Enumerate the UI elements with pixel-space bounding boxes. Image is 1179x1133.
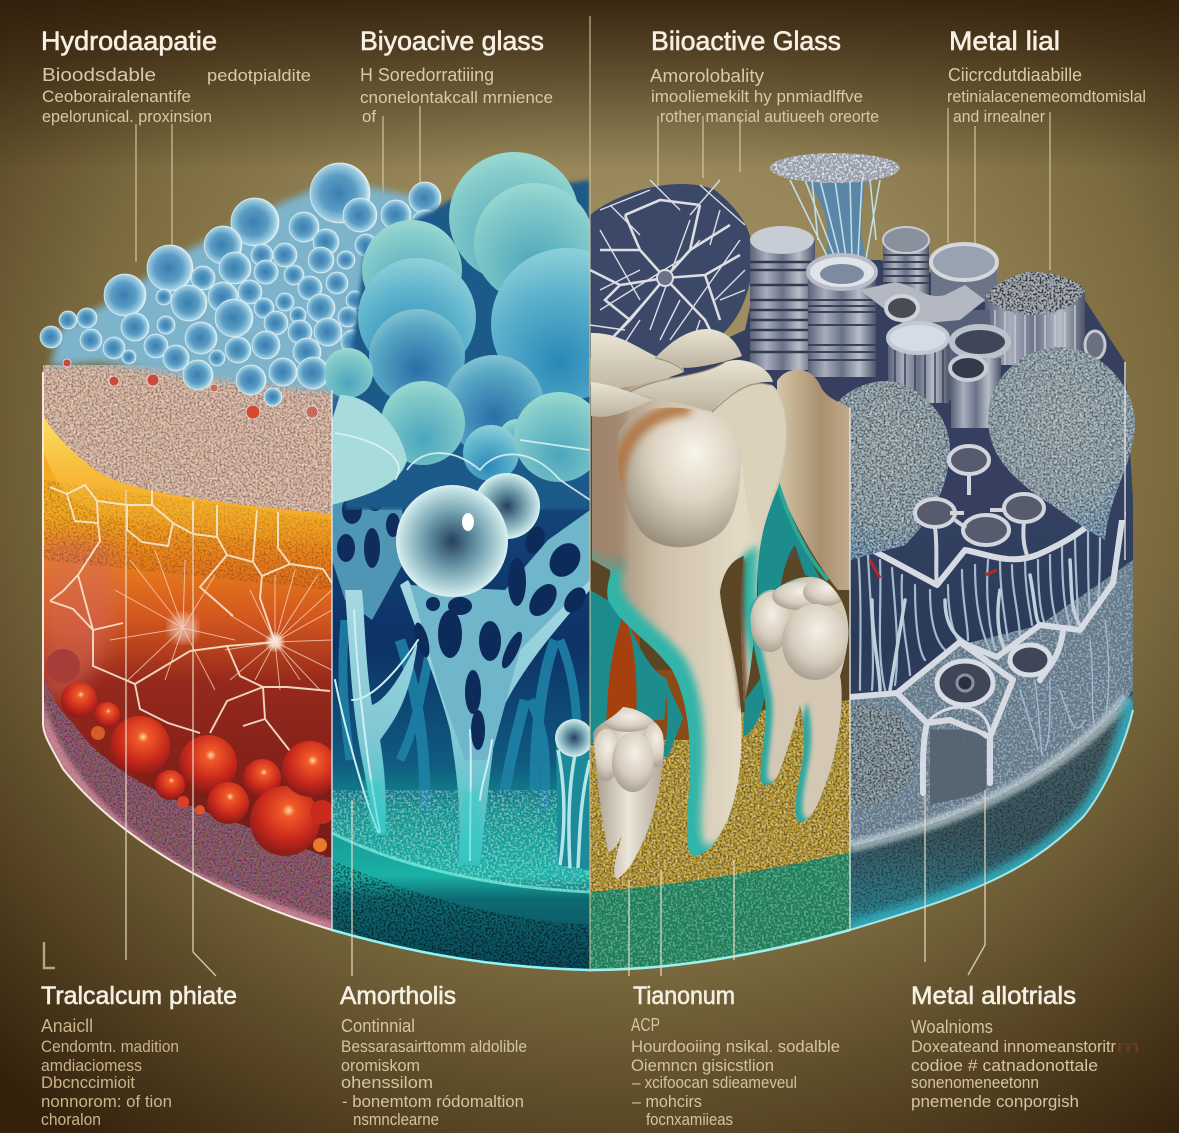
text block: top column 1: epelorunical. proxinsion: [42, 107, 212, 126]
text block: top column 1: [41, 26, 311, 126]
text block: bottom column 1: Anaicll: [41, 1016, 93, 1036]
bubble cluster: hydroxyapatite top: [40, 163, 441, 419]
text block: bottom column 3: Hourdooiing nsikal. sodalble: [631, 1037, 840, 1056]
metal cylinder C: [883, 227, 929, 300]
bright foam band: [850, 697, 1127, 847]
text block: bottom column 3: Oiemncn gisicstlion: [631, 1056, 774, 1075]
text block: top column 4: [947, 26, 1146, 126]
panel: bioactive glass lattice section: [332, 380, 593, 970]
foam field above band: [850, 560, 1133, 847]
back tooth: [777, 369, 850, 590]
small sphere stalk: [555, 719, 593, 870]
text block: bottom column 2: Continnial: [341, 1016, 415, 1036]
text block: bottom column 1: amdiaciomess: [41, 1056, 142, 1075]
text block: bottom column 2: nsmnclearne: [353, 1110, 439, 1129]
web struts: [850, 503, 1123, 793]
panel: hydroxyapatite layered section: [43, 365, 338, 932]
text block: bottom column 1: choralon: [41, 1110, 101, 1129]
text block: top column 3: imooliemekilt hy pnmiadlffve: [651, 87, 863, 106]
trabecular dome: [590, 180, 753, 358]
small molar right: [750, 574, 855, 822]
lattice mesh left: [332, 502, 402, 620]
heading: Metal lial: [949, 26, 1060, 56]
text block: top column 4: and irnealner: [953, 107, 1045, 126]
heading: Tianonum: [633, 982, 735, 1010]
strut rings: [937, 645, 1050, 705]
text block: bottom column 2: oromiskom: [341, 1056, 420, 1075]
text block: bottom column 4: pnemende conporgish: [911, 1092, 1079, 1111]
text block: bottom column 1: Cendomtn. madition: [41, 1037, 179, 1056]
scaffold backing: [590, 260, 1125, 520]
heading: Tralcalcum phiate: [41, 982, 237, 1010]
text block: top column 1: pedotpialdite: [207, 66, 311, 85]
beige granular top: [43, 365, 332, 514]
text block: top column 2: H Soredorratiiing: [360, 65, 494, 85]
heading: Metal allotrials: [911, 982, 1076, 1010]
metal structures: top scaffolds: [590, 153, 1125, 520]
crown cusps: [591, 329, 786, 547]
text block: bottom column 3: [631, 982, 840, 1129]
text block: top column 2: [360, 26, 553, 126]
metal cylinder B: [808, 255, 876, 377]
heading: Amortholis: [340, 982, 456, 1010]
glass orb on lattice: [396, 485, 508, 597]
text block: bottom column 1: [41, 982, 237, 1129]
speckled gold floor: [590, 690, 850, 970]
lattice plate block: [985, 272, 1085, 365]
main molar: [592, 377, 788, 856]
crackle floor: [332, 790, 590, 893]
text block: bottom column 3: ACP: [631, 1015, 660, 1035]
cell wall lines: [50, 485, 332, 751]
background strands: [343, 620, 577, 810]
text block: bottom column 4: m: [1116, 1037, 1140, 1056]
text block: top column 3: Amorolobality: [650, 66, 764, 86]
text block: bottom column 3: focnxamiieas: [646, 1110, 733, 1129]
small molar left: [592, 707, 668, 879]
lattice mesh centre: [410, 510, 590, 760]
heading: Hydrodaapatie: [41, 26, 217, 56]
text block: bottom column 2: [340, 982, 527, 1129]
metal cylinder A: [750, 226, 815, 370]
text block: top column 1: Ceoborairalenantife: [42, 87, 191, 106]
heading: Biioactive Glass: [651, 26, 841, 56]
second orb: [474, 473, 540, 539]
text block: top column 4: Ciicrcdutdiaabille: [948, 65, 1082, 85]
fan scaffold: [770, 153, 900, 262]
arch interior speckle: [930, 729, 986, 805]
pink left glow: [43, 540, 116, 700]
text block: top column 2: cnonelontakcall mrnience: [360, 88, 553, 107]
orange speckle: [43, 480, 332, 590]
text block: top column 3: [650, 26, 879, 126]
center divider line: [589, 16, 591, 972]
heading: Biyoacive glass: [360, 26, 544, 56]
yellow band: [43, 415, 332, 545]
top leader lines: [136, 106, 1050, 270]
teal back roots: [590, 480, 822, 757]
small ring far right: [1085, 331, 1105, 359]
text block: bottom column 2: Bessarasairttomm aldolible: [341, 1037, 527, 1056]
cylinder rim glow: [43, 362, 1133, 970]
strand lines: [335, 610, 492, 860]
text block: bottom column 1: nonnorom: of tion: [41, 1092, 172, 1111]
glass spheres: bioactive top: [326, 152, 590, 510]
text block: bottom column 4: sonenomeneetonn: [911, 1073, 1039, 1092]
text block: bottom column 3: – mohcirs: [632, 1092, 702, 1111]
text block: bottom column 2: - bonemtom ródomaltion: [342, 1092, 524, 1111]
red fibre accents: [870, 560, 997, 578]
metal ring D: [931, 244, 997, 302]
text block: bottom column 4: [911, 982, 1140, 1111]
text block: bottom column 3: – xcifoocan sdieameveul: [632, 1073, 797, 1092]
lattice trunk centre: [400, 570, 590, 865]
foam sphere two: [988, 347, 1135, 540]
speckled outer floor: [850, 690, 1133, 935]
teal rim glow: [850, 700, 1133, 930]
metal cylinder F: [888, 323, 949, 403]
bottom leader lines: [126, 490, 985, 976]
teal glow on trunk bases: [364, 780, 480, 860]
text block: top column 1: Bioodsdable: [42, 65, 156, 85]
text block: top column 4: retinialacenemeomdtomislal: [947, 87, 1146, 106]
lower foam sphere: [850, 705, 915, 805]
mark: corner L: [44, 942, 55, 968]
lattice trunk left: [345, 590, 418, 835]
fine vertical strands: [858, 510, 1109, 755]
scaffold rings: [915, 446, 1044, 585]
text block: top column 2: of: [362, 107, 376, 126]
metal ring G: [950, 327, 1008, 428]
text block: top column 3: rother mancial autiueeh oreorte: [660, 107, 879, 126]
dark fill behind roots: [590, 560, 850, 730]
red spheres: [46, 649, 338, 856]
panel: metal scaffold section: [850, 368, 1133, 929]
granular base: [43, 680, 332, 932]
bracket connector: [860, 282, 990, 400]
text block: bottom column 4: codioe # catnadonottale: [911, 1056, 1098, 1075]
text block: bottom column 1: Dbcnccimioit: [41, 1073, 135, 1092]
foam sphere one: [830, 381, 950, 560]
text block: bottom column 4: Doxeateand innomeanstoritr: [911, 1037, 1116, 1056]
text block: bottom column 4: Woalnioms: [911, 1017, 993, 1037]
starbursts: [110, 550, 332, 690]
text block: bottom column 2: ohenssilom: [341, 1073, 433, 1092]
panel: tooth section backdrop: [590, 385, 850, 970]
